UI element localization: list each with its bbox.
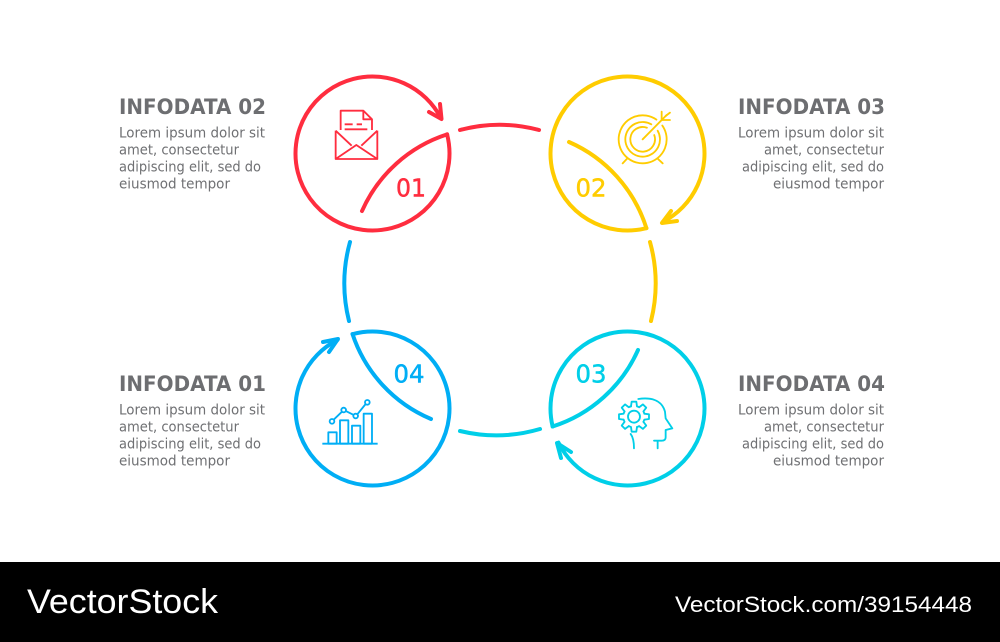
- text block: infodata 03: Lorem ipsum dolor sit: [738, 126, 884, 142]
- text block: infodata 01: [119, 372, 266, 470]
- text block: infodata 02: [119, 95, 266, 192]
- text block: infodata 01: INFODATA 01: [119, 372, 266, 396]
- central ring segments: [344, 125, 656, 435]
- icon: bar chart with trend line: [322, 400, 378, 444]
- text block: infodata 03: adipiscing elit, sed do: [742, 160, 884, 176]
- text block: infodata 02: eiusmod tempor: [119, 176, 230, 192]
- text block: infodata 01: adipiscing elit, sed do: [119, 436, 261, 452]
- text block: infodata 02: INFODATA 02: [119, 95, 266, 119]
- text block: infodata 04: [738, 372, 885, 470]
- text block: infodata 02: amet, consectetur: [119, 142, 239, 158]
- panel: step 04 blue circle: [278, 314, 467, 503]
- panel: step 03 cyan circle: [535, 316, 720, 501]
- icon: envelope with document: [336, 111, 377, 159]
- text block: infodata 04: amet, consectetur: [764, 420, 884, 436]
- text block: infodata 04: INFODATA 04: [738, 372, 885, 396]
- footer logo text: VectorStock: [27, 583, 219, 621]
- text block: infodata 04: eiusmod tempor: [773, 454, 884, 470]
- text block: infodata 04: Lorem ipsum dolor sit: [738, 402, 884, 418]
- text block: infodata 03: [738, 95, 885, 192]
- text block: infodata 03: eiusmod tempor: [773, 176, 884, 192]
- text block: infodata 03: amet, consectetur: [764, 142, 884, 158]
- number 04: 04: [394, 360, 424, 388]
- number 02: 02: [576, 174, 606, 202]
- text block: infodata 01: eiusmod tempor: [119, 454, 230, 470]
- text block: infodata 02: Lorem ipsum dolor sit: [119, 126, 265, 142]
- footer bar: [0, 562, 1000, 642]
- icon: target with arrow: [619, 112, 670, 163]
- panel: step 01 red circle: [279, 60, 466, 247]
- text block: infodata 04: adipiscing elit, sed do: [742, 436, 884, 452]
- text block: infodata 01: Lorem ipsum dolor sit: [119, 402, 265, 418]
- text block: infodata 02: adipiscing elit, sed do: [119, 160, 261, 176]
- text block: infodata 01: amet, consectetur: [119, 420, 239, 436]
- footer url text: VectorStock.com/39154448: [675, 592, 972, 617]
- panel: step 02 yellow circle: [534, 60, 721, 247]
- number 03: 03: [576, 360, 606, 388]
- number 01: 01: [396, 174, 426, 202]
- text block: infodata 03: INFODATA 03: [738, 95, 885, 119]
- icon: head with gear: [619, 398, 672, 448]
